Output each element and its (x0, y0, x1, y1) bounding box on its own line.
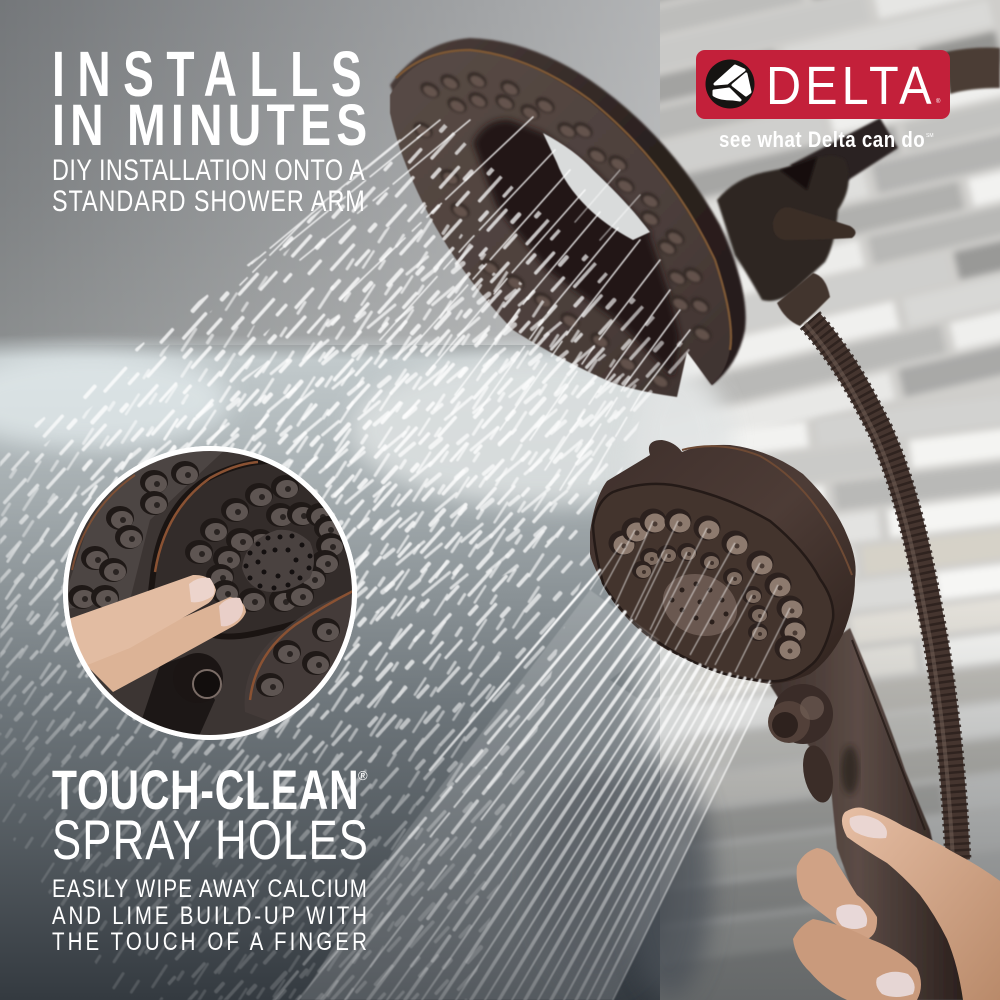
heading: touch-clean spray holes: TOUCH-CLEAN (52, 760, 359, 822)
sub-element: central hole cluster (242, 530, 314, 592)
icon: delta triangle mark (714, 66, 750, 100)
text block: touch-clean description (52, 874, 367, 955)
text block: touch-clean description: EASILY WIPE AWAY CALCIUM (52, 874, 367, 902)
sub-element: nozzle face (593, 484, 833, 681)
heading: installs in minutes: IN MINUTES (52, 93, 367, 158)
sub-element: thumb (842, 808, 1000, 1000)
heading: installs in minutes (52, 39, 367, 158)
background: shower wall tiles (556, 0, 1000, 1000)
background: blurred bathroom left side (0, 0, 730, 1000)
water streams from rain nozzles (240, 117, 690, 490)
text block: installation description (52, 153, 365, 218)
sub-element: head shell (590, 440, 856, 684)
sub-element: fingers (60, 575, 246, 692)
heading: touch-clean spray holes: SPRAY HOLES (52, 809, 368, 871)
heading: touch-clean spray holes: ® (358, 768, 368, 783)
icon: diverter lever (773, 207, 856, 240)
sub-element: spray knob (184, 653, 223, 699)
logo: delta badge (696, 50, 950, 119)
water streams from hand nozzles (590, 521, 790, 678)
sub-element: finger one (797, 848, 877, 939)
inset circle: touch-clean close-up (60, 440, 360, 750)
sub-element: nozzles (608, 508, 806, 660)
sub-element: centre spray face (150, 460, 360, 637)
tagline: see what Delta can do (719, 129, 925, 152)
sub-element: lower lobe (284, 593, 352, 630)
icon: centre opening (473, 120, 680, 377)
hand holding shower (793, 808, 1000, 1000)
water spray: rain shower (0, 120, 690, 1000)
text block: installation description: STANDARD SHOWER ARM (52, 184, 365, 218)
tagline: SM (926, 133, 934, 139)
heading: touch-clean spray holes (52, 760, 368, 871)
upper rain shower head (390, 38, 746, 397)
hand shower (590, 440, 966, 1000)
water spray: hand shower (274, 570, 770, 1000)
sub-element: finger two (793, 919, 921, 1000)
logo: delta badge: DELTA (766, 55, 932, 116)
heading: installs in minutes: INSTALLS (52, 39, 362, 110)
sub-element: mode button and toggle (768, 684, 838, 805)
icon: spray nozzles (410, 69, 715, 391)
logo: delta badge: ® (936, 98, 941, 105)
text block: installation description: DIY INSTALLATION ONTO A (52, 153, 365, 187)
text block: touch-clean description: AND LIME BUILD-UP WITH (52, 901, 367, 929)
hose (805, 320, 958, 860)
sub-element: handle (770, 628, 966, 1000)
text block: touch-clean description: THE TOUCH OF A FINGER (52, 927, 367, 955)
overhead shower arm and mount (717, 48, 1000, 326)
